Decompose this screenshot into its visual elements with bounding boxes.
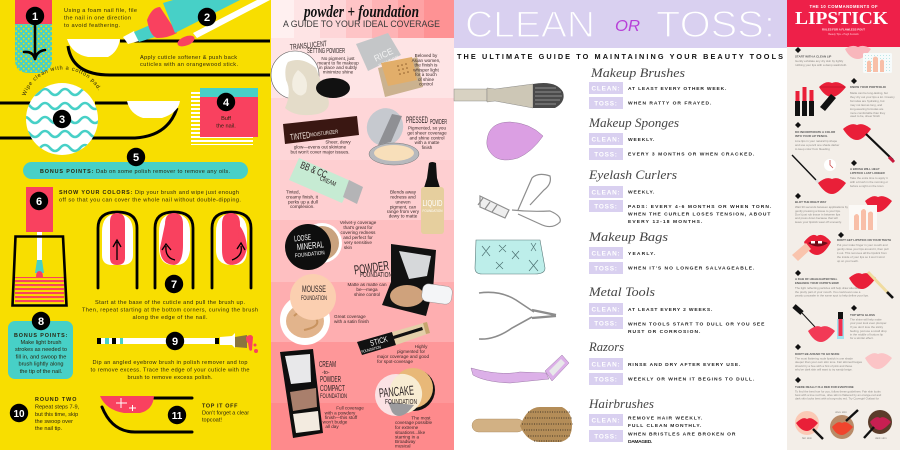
tip 7: highlighter: ENHANCE YOUR CUPID'S BOW xyxy=(795,281,839,285)
pressed powder: POWDER xyxy=(430,119,447,126)
tip 8: gloss: in the middle of bottom lip xyxy=(850,332,883,336)
liquid foundation: Blends away xyxy=(390,190,417,194)
step 7: nail strokes: Then, repeat starting at the bottom corners, curving the brush xyxy=(82,308,258,314)
cream to powder compact foundation: Full coverage xyxy=(336,406,364,410)
loose mineral foundation: very sensitive xyxy=(344,240,372,245)
step 8: bonus points card: fill in, and swoop the xyxy=(16,354,66,360)
cream to powder compact foundation: FOUNDATION xyxy=(320,393,347,400)
tip 2: know your portfolio xyxy=(795,78,895,118)
section: eyelash curlers: TOSS: xyxy=(594,204,618,210)
tip 8: gloss: If you don't love the sticky xyxy=(850,325,884,329)
tip 2: know your portfolio: they dry out your lips a lot. Creamy xyxy=(850,95,895,99)
tinted moisturizer: TINTED xyxy=(290,130,311,142)
section: makeup bags: TOSS: xyxy=(594,266,618,272)
razor xyxy=(471,355,569,383)
tip 9: nude: should try a hue with a hint of pink and those xyxy=(795,364,853,368)
powder foundation xyxy=(347,244,453,316)
tinted moisturizer: glow—evens out skintone xyxy=(294,144,347,150)
tip 9: nude: who've dark skin will want to try sandy beige. xyxy=(795,368,853,372)
tip 5: blot: Wait 30 seconds between applications by xyxy=(795,205,848,209)
pressed powder: and shine control xyxy=(410,136,444,140)
liquid foundation: range from very xyxy=(387,209,420,214)
eyelash curler xyxy=(478,174,560,227)
section: metal tools: TOSS: xyxy=(594,320,618,328)
cream to powder compact foundation: all day xyxy=(325,424,339,429)
cream to powder compact foundation xyxy=(280,349,364,438)
loose mineral foundation: that's great for xyxy=(343,225,373,230)
tip 9: nude: deeper than your own skin tone. Fair skinned beiges xyxy=(795,360,863,364)
tip 7: highlighter: pearly concealer in the same spot to help define your lips. xyxy=(795,294,869,298)
translucent setting powder: TRANSLUCENT xyxy=(290,39,327,52)
tip 7: highlighter: the pretty part of your mouth. You could even use a xyxy=(795,290,861,294)
step 11: top coat: topcoat! xyxy=(202,418,222,424)
loose mineral foundation: Velvet-y coverage xyxy=(340,220,377,225)
step 5: bonus points xyxy=(23,148,248,179)
tip 2: know your portfolio: Matte can be long-lasting, but xyxy=(850,91,888,95)
liquid foundation: FOUNDATION xyxy=(422,208,443,213)
loose mineral foundation: covering redness xyxy=(341,230,376,235)
step 11: top coat: TOP IT OFF xyxy=(202,404,238,410)
guide title xyxy=(283,2,440,29)
section: makeup sponges: WEEKLY. xyxy=(628,137,655,143)
step 1: file the nail: the nail in one direction xyxy=(64,16,131,22)
powder foundation: POWDER xyxy=(353,258,390,277)
stick foundation: STICK xyxy=(369,334,389,348)
step 4: buff xyxy=(191,88,258,145)
section: hairbrushes xyxy=(588,397,736,445)
tip 10: red for everyone: best with a true red hue, olive skin is flattered by an orange-red and xyxy=(795,393,882,397)
section: razors: TOSS: xyxy=(594,376,618,384)
tinted moisturizer: but won't cover major issues. xyxy=(290,150,350,154)
loose mineral foundation: FOUNDATION xyxy=(295,250,325,259)
step 10: round two xyxy=(10,397,80,432)
tip 1: clean lip: rubbing your lips with a damp washcloth. xyxy=(795,63,847,67)
loose mineral foundation xyxy=(285,220,377,270)
step 9: angled brush xyxy=(90,332,258,381)
pancake foundation: Broadway xyxy=(395,439,416,444)
mousse foundation: FOUNDATION xyxy=(301,296,327,302)
rice powder: control xyxy=(419,82,433,86)
tip 6: teeth xyxy=(792,232,891,263)
section: hairbrushes: REMOVE HAIR WEEKLY. xyxy=(628,416,703,422)
step 8: bonus points card: Make light brush xyxy=(20,340,62,346)
pancake foundation: PANCAKE xyxy=(378,382,415,400)
rice powder: RICE xyxy=(372,46,395,64)
step 10: round two: Repeat steps 7-9, xyxy=(35,404,80,410)
pancake foundation: starring in a xyxy=(395,434,419,440)
section: eyelash curlers: WHEN THE CURLER LOSES TENSION, ABOUT xyxy=(628,212,771,218)
stick foundation: pigmented for xyxy=(397,349,426,354)
guide title: A GUIDE TO YOUR IDEAL COVERAGE xyxy=(283,19,440,29)
cream to powder compact foundation: COMPACT xyxy=(320,383,345,393)
tip 4: lipstick brush: Take the extra time to apply it xyxy=(850,176,888,180)
hairbrush xyxy=(472,407,573,442)
section: hairbrushes: WHEN BRISTLES ARE BROKEN OR xyxy=(628,432,736,438)
step 10: round two: 10 xyxy=(13,409,25,420)
tip 8: gloss: for a similar effect. xyxy=(850,336,874,340)
BB and CC cream: CREAM xyxy=(318,175,337,188)
rice powder: Beloved by xyxy=(415,53,438,58)
step 11: top coat: Don't forget a clear xyxy=(202,410,249,416)
pressed powder: with a matte xyxy=(415,140,440,145)
cream to powder compact foundation: -to- xyxy=(322,370,330,376)
step 7: nail strokes xyxy=(82,212,258,321)
tip 8: gloss: feeling, just use a small drop xyxy=(850,329,887,333)
cream to powder compact foundation: POWDER xyxy=(320,374,341,384)
step 2: push back cuticles: cuticles with an orangewood stick. xyxy=(140,62,238,68)
section: makeup sponges xyxy=(588,116,755,160)
stick foundation: FOUNDATION xyxy=(361,344,381,354)
pressed powder: PRESSED xyxy=(406,115,428,126)
section: razors: WEEKLY OR WHEN IT BEGINS TO DULL. xyxy=(628,376,755,382)
section: metal tools: CLEAN: xyxy=(592,306,620,314)
step 9: angled brush: Dip an angled eyebrow brush in polish remover and top xyxy=(92,360,248,366)
step 6: polish bottle: 6 xyxy=(36,196,42,208)
step 4: buff: 4 xyxy=(223,97,230,109)
step 11: top coat: 11 xyxy=(172,411,183,422)
BB and CC cream: complexion. xyxy=(290,204,315,209)
section: makeup bags: CLEAN: xyxy=(592,250,620,258)
pancake foundation: FOUNDATION xyxy=(385,399,417,406)
tip 4: lipstick brush: with a brush in the morning or xyxy=(850,180,888,184)
section: makeup bags: YEARLY. xyxy=(628,251,656,257)
clean or toss header: CLEAN xyxy=(465,4,595,45)
section: makeup bags xyxy=(588,230,755,274)
tip 8: gloss: The shine will help make xyxy=(850,318,882,322)
metal nippers xyxy=(479,292,556,339)
section: makeup bags: WHEN IT'S NO LONGER SALVAGEABLE. xyxy=(628,266,755,272)
mousse foundation: with a satin finish xyxy=(334,319,369,324)
tip 1: clean lip: Gently exfoliate any dry skin by lightly xyxy=(795,59,844,63)
translucent setting powder: in place and subtly xyxy=(319,65,358,70)
powder foundation: be—mega xyxy=(356,287,378,292)
step 7: nail strokes: 7 xyxy=(171,279,177,291)
section: metal tools: AT LEAST EVERY 2 WEEKS. xyxy=(628,307,713,313)
tip 8: gloss: your pout look even plumper. xyxy=(850,321,887,325)
tip 7: highlighter: A DAB OF HIGHLIGHTER WILL xyxy=(795,277,838,281)
step 9: angled brush: brush to remove excess polish. xyxy=(128,375,213,381)
makeup brush xyxy=(454,83,564,108)
section: makeup sponges: TOSS: xyxy=(594,152,618,158)
section: metal tools: WHEN TOOLS START TO DULL OR YOU SEE xyxy=(628,322,765,328)
translucent setting powder: meant to fix makeup xyxy=(317,60,359,66)
step 2: push back cuticles: 2 xyxy=(204,12,210,24)
step 8: bonus points card xyxy=(8,312,73,379)
step 6: polish bottle xyxy=(12,187,241,306)
step 7: nail strokes: along the edge of the nail. xyxy=(132,315,208,321)
step 6: polish bottle: Dip your brush and wipe just enough xyxy=(135,190,239,196)
tip 2: know your portfolio: long-wearing formulas are xyxy=(850,107,884,111)
tip 9: nude: The most flattering nude lipstick is one shade xyxy=(795,356,853,360)
step 4: buff: Buff xyxy=(221,116,231,122)
liquid foundation: uneven xyxy=(395,200,411,204)
rice powder: the finish is xyxy=(415,62,438,68)
tip 3: lip pencil xyxy=(795,122,894,162)
step 5: bonus points: 5 xyxy=(133,152,139,164)
makeup sponge xyxy=(487,122,543,160)
tip 3: lip pencil: INTO YOUR LIP PENCIL xyxy=(795,134,828,138)
liquid foundation: redness and xyxy=(390,194,416,200)
panel: nail tutorial xyxy=(0,0,271,450)
tip 6: teeth: it out. This removes all the lipstick from xyxy=(837,251,887,255)
tip 9: nude: DON'T BE AFRAID TO GO NUDE xyxy=(795,352,839,356)
mousse foundation: Great coverage xyxy=(334,314,366,319)
section: makeup sponges: Makeup Sponges xyxy=(588,116,679,130)
section: metal tools: RUST OR CORROSION. xyxy=(628,329,701,335)
tip 2: know your portfolio: KNOW YOUR PORTFOLIO xyxy=(850,85,887,89)
step 9: angled brush: to remove excess. Trace the edge of your cuticle with the xyxy=(90,368,250,374)
lipstick header xyxy=(787,0,900,47)
tip 9: nude xyxy=(795,344,892,372)
cream to powder compact foundation: CREAM xyxy=(319,360,336,369)
tip 4: lipstick brush: A BRUSH WILL HELP xyxy=(850,167,879,171)
section: hairbrushes: TOSS: xyxy=(594,434,618,440)
tip 8: gloss: TOP WITH GLOSS xyxy=(850,313,875,317)
step 8: bonus points card: 8 xyxy=(38,316,44,328)
section: makeup brushes: AT LEAST EVERY OTHER WEEK. xyxy=(628,86,727,92)
pancake foundation: for extreme xyxy=(395,425,419,430)
guide title: powder + foundation xyxy=(302,2,419,21)
tip 5: blot: gently pressing a tissue to your lips. xyxy=(795,209,841,213)
step 1: file the nail: 1 xyxy=(32,11,38,23)
section: eyelash curlers: EVERY 12-18 MONTHS. xyxy=(628,219,703,225)
tip 10: red for everyone: THERE REALLY IS A RED FOR EVERYONE xyxy=(795,385,854,389)
loose mineral foundation: and perfect for xyxy=(343,235,373,240)
step 6: polish bottle: off so that you can cover the whole nail without double-dipping. xyxy=(59,198,241,204)
tip 4: lipstick brush xyxy=(792,155,888,194)
section: razors: Razors xyxy=(588,340,624,354)
pancake foundation: The most xyxy=(411,416,431,420)
translucent setting powder: No pigment, just xyxy=(321,56,355,61)
section: hairbrushes: DAMAGED. xyxy=(628,439,653,445)
step 10: round two: the swoop over xyxy=(35,419,73,425)
rice powder: of shine xyxy=(418,77,434,82)
cream to powder compact foundation: finish—this stuff xyxy=(325,415,358,420)
tinted moisturizer: Sheer, dewy xyxy=(325,140,351,144)
step 5: bonus points: Dab on some polish remover to remove any oils. xyxy=(96,169,230,175)
tip 7: highlighter xyxy=(795,270,893,298)
pancake foundation: situations...like xyxy=(395,430,426,435)
section: metal tools xyxy=(588,285,765,335)
step 7: nail strokes: Start at the base of the cuticle and pull the brush up. xyxy=(95,300,245,306)
tip 10: red for everyone: dark skin looks best with a burg-ruby red. Try Covergirl Outlast for xyxy=(795,396,879,400)
section: razors: RINSE AND DRY AFTER EVERY USE. xyxy=(628,362,741,368)
liquid foundation: pigment, can xyxy=(390,204,417,210)
stick foundation xyxy=(357,322,430,364)
liquid foundation: dewy to matte xyxy=(389,214,418,218)
section: eyelash curlers: PADS: EVERY 4-6 MONTHS OR WHEN TORN. xyxy=(628,204,772,210)
step 3: wipe clean xyxy=(0,66,180,155)
powder foundation: shine control xyxy=(354,292,380,297)
tip 10: red for everyone: fair skin xyxy=(802,436,812,440)
step 8: bonus points card: the tip of the nail. xyxy=(20,369,63,375)
section: makeup brushes xyxy=(589,66,727,109)
step 4: buff: the nail. xyxy=(216,124,236,130)
section: hairbrushes: FULL CLEAN MONTHLY. xyxy=(628,423,702,429)
section: eyelash curlers: WEEKLY. xyxy=(628,190,655,196)
pancake foundation: musical xyxy=(395,444,411,448)
step 5: bonus points: BONUS POINTS: xyxy=(40,169,94,175)
panel: commandments of lipstick xyxy=(787,0,900,450)
mousse foundation: MOUSSE xyxy=(302,284,326,295)
tip 10: red for everyone: dark skin xyxy=(875,436,887,440)
step 8: bonus points card: strokes as needed to xyxy=(15,347,67,353)
tip 6: teeth: gently close your lips around it, then pull xyxy=(837,247,889,251)
section: eyelash curlers: CLEAN: xyxy=(592,190,620,196)
tip 5: blot: leave your lipstick wear off unevenly. xyxy=(795,220,842,224)
BB and CC cream: BB & CC xyxy=(299,160,329,181)
pressed powder: Pigmented, so you xyxy=(408,126,446,130)
clean or toss header: OR xyxy=(615,18,640,35)
translucent setting powder xyxy=(271,39,359,115)
step 9: angled brush: 9 xyxy=(172,336,178,348)
tip 6: teeth: Put your index finger in your mouth and xyxy=(837,243,888,247)
step 2: push back cuticles: Apply cuticle softener & push back xyxy=(140,55,237,61)
liquid foundation: LIQUID xyxy=(422,199,443,208)
pressed powder xyxy=(361,102,447,165)
tip 10: red for everyone xyxy=(795,377,892,440)
pressed powder: finish xyxy=(422,145,433,150)
stick foundation: major coverage and good xyxy=(377,354,429,359)
BB and CC cream: creamy finish, it xyxy=(286,194,319,200)
pressed powder: get sheer coverage xyxy=(407,130,447,136)
section: hairbrushes: CLEAN: xyxy=(592,418,620,424)
stick foundation: Highly xyxy=(415,344,428,349)
panel: clean or toss xyxy=(454,0,787,450)
clean or toss header: TOSS: xyxy=(656,4,775,45)
translucent setting powder: minimize shine xyxy=(323,70,354,74)
tip 5: blot: Don't just rub tissue in between lips xyxy=(795,212,841,216)
rice powder xyxy=(356,33,440,97)
rice powder: Asian women, xyxy=(412,58,440,63)
makeup bag xyxy=(475,240,545,274)
section: makeup brushes: WHEN RATTY OR FRAYED. xyxy=(628,100,712,106)
tip 4: lipstick brush: before a night on the town xyxy=(850,184,884,188)
section: razors: CLEAN: xyxy=(592,362,620,368)
tip 5: blot: BLOT THE RIGHT WAY xyxy=(795,200,826,204)
tip 6: teeth: the inside of your lips so it won't wind xyxy=(837,255,885,259)
section: eyelash curlers: Eyelash Curlers xyxy=(588,168,677,182)
section: makeup brushes: CLEAN: xyxy=(592,86,620,92)
lipstick header: Beauty Tips + Hugh Fenwick xyxy=(828,33,859,36)
step 8: bonus points card: brush lightly along xyxy=(18,362,64,368)
section: makeup sponges: CLEAN: xyxy=(592,136,620,144)
tip 7: highlighter: The light reflecting particles will help draw attention to xyxy=(795,286,864,290)
subtitle: THE ULTIMATE GUIDE TO MAINTAINING YOUR BEAUTY TOOLS xyxy=(457,52,783,61)
step 6: polish bottle: SHOW YOUR COLORS: xyxy=(59,190,133,196)
loose mineral foundation: skin xyxy=(344,245,353,250)
tip 3: lip pencil: Line lips in your natural lip shape xyxy=(795,139,837,143)
loose mineral foundation: LOOSE xyxy=(294,233,311,243)
clean or toss header xyxy=(454,0,787,48)
step 1: file the nail: to avoid feathering. xyxy=(64,23,120,29)
section: makeup brushes: TOSS: xyxy=(594,100,618,108)
BB and CC cream: Tinted, xyxy=(286,190,300,194)
liquid foundation xyxy=(387,162,444,234)
powder foundation: FOUNDATION xyxy=(360,272,392,279)
rice powder: for a touch xyxy=(415,72,437,77)
tip 6: teeth: up on your teeth. xyxy=(837,259,859,263)
tip 4: lipstick brush: LIPSTICK LAST LONGER xyxy=(850,171,886,175)
section: makeup sponges: EVERY 3 MONTHS OR WHEN CRACKED. xyxy=(628,152,755,158)
tip 3: lip pencil: and use a pencil one shade darker xyxy=(795,143,839,147)
tip 10: red for everyone: olive skin xyxy=(835,410,847,414)
step 11: top coat xyxy=(100,396,249,432)
tip 2: know your portfolio: more comfortable than they xyxy=(850,111,886,115)
tip 2: know your portfolio: used to be, sheer finish xyxy=(850,114,880,118)
section: eyelash curlers xyxy=(588,168,772,225)
step 1: file the nail: Using a foam nail file, file xyxy=(64,8,137,14)
tip 2: know your portfolio: may not last as long, and xyxy=(850,103,883,107)
tip 6: teeth: DON'T GET LIPSTICK ON YOUR TEETH xyxy=(837,238,891,242)
mousse foundation xyxy=(280,274,369,345)
rice powder: POWDER xyxy=(378,55,401,69)
rice powder: whisper light xyxy=(413,68,439,72)
section: makeup brushes: Makeup Brushes xyxy=(590,66,685,80)
step 10: round two: ROUND TWO xyxy=(35,397,77,403)
section: metal tools: Metal Tools xyxy=(588,285,655,299)
step 3: wipe clean: 3 xyxy=(59,114,65,126)
step 8: bonus points card: BONUS POINTS: xyxy=(14,333,68,339)
tip 5: blot: and press down because that will xyxy=(795,216,838,220)
section: makeup bags: Makeup Bags xyxy=(588,230,668,244)
step 2: push back cuticles xyxy=(67,0,270,75)
tinted moisturizer: MOISTURIZER xyxy=(310,129,339,139)
section: hairbrushes: Hairbrushes xyxy=(588,397,654,411)
step 10: round two: but this time, skip xyxy=(35,412,78,418)
cream to powder compact foundation: won't budge xyxy=(323,420,348,424)
tip 3: lip pencil: DO INCORPORATE A COLOR xyxy=(795,130,836,134)
step 1: file the nail xyxy=(15,0,137,73)
tip 8: gloss xyxy=(794,305,887,342)
powder foundation: Matte as matte can xyxy=(347,282,387,287)
loose mineral foundation: MINERAL xyxy=(296,239,324,252)
pancake foundation xyxy=(375,368,435,448)
step 10: round two: the nail tip. xyxy=(35,426,62,432)
pancake foundation: coverage possible xyxy=(395,420,432,425)
tip 3: lip pencil: to keep color from bleeding xyxy=(795,147,830,151)
lipstick header: LIPSTICK xyxy=(795,8,888,28)
lipstick header: RULES FOR A FLAWLESS POUT xyxy=(822,28,865,32)
stick foundation: for spot-coverage xyxy=(377,359,413,364)
tip 1: clean lip: START WITH A CLEAN LIP xyxy=(795,54,831,58)
BB and CC cream: perks up a dull xyxy=(288,200,318,204)
tip 2: know your portfolio: formulas are hydrating, but xyxy=(850,99,885,103)
tip 10: red for everyone: To find the best hue for you, follow these guidelines: Fair skin looks xyxy=(795,390,881,394)
step 3: wipe clean: Wipe clean with a cotton pad. xyxy=(22,66,100,96)
cream to powder compact foundation: with a powdery xyxy=(325,410,356,416)
tip 5: blot xyxy=(795,193,892,230)
section: razors xyxy=(588,340,755,385)
BB and CC cream xyxy=(286,158,363,209)
lipstick header: THE 10 COMMANDMENTS OF xyxy=(810,4,878,9)
tinted moisturizer xyxy=(283,116,359,154)
tip 1: clean lip xyxy=(795,46,892,73)
translucent setting powder: SETTING POWDER xyxy=(307,48,345,55)
panel: powder and foundation guide xyxy=(271,0,454,450)
